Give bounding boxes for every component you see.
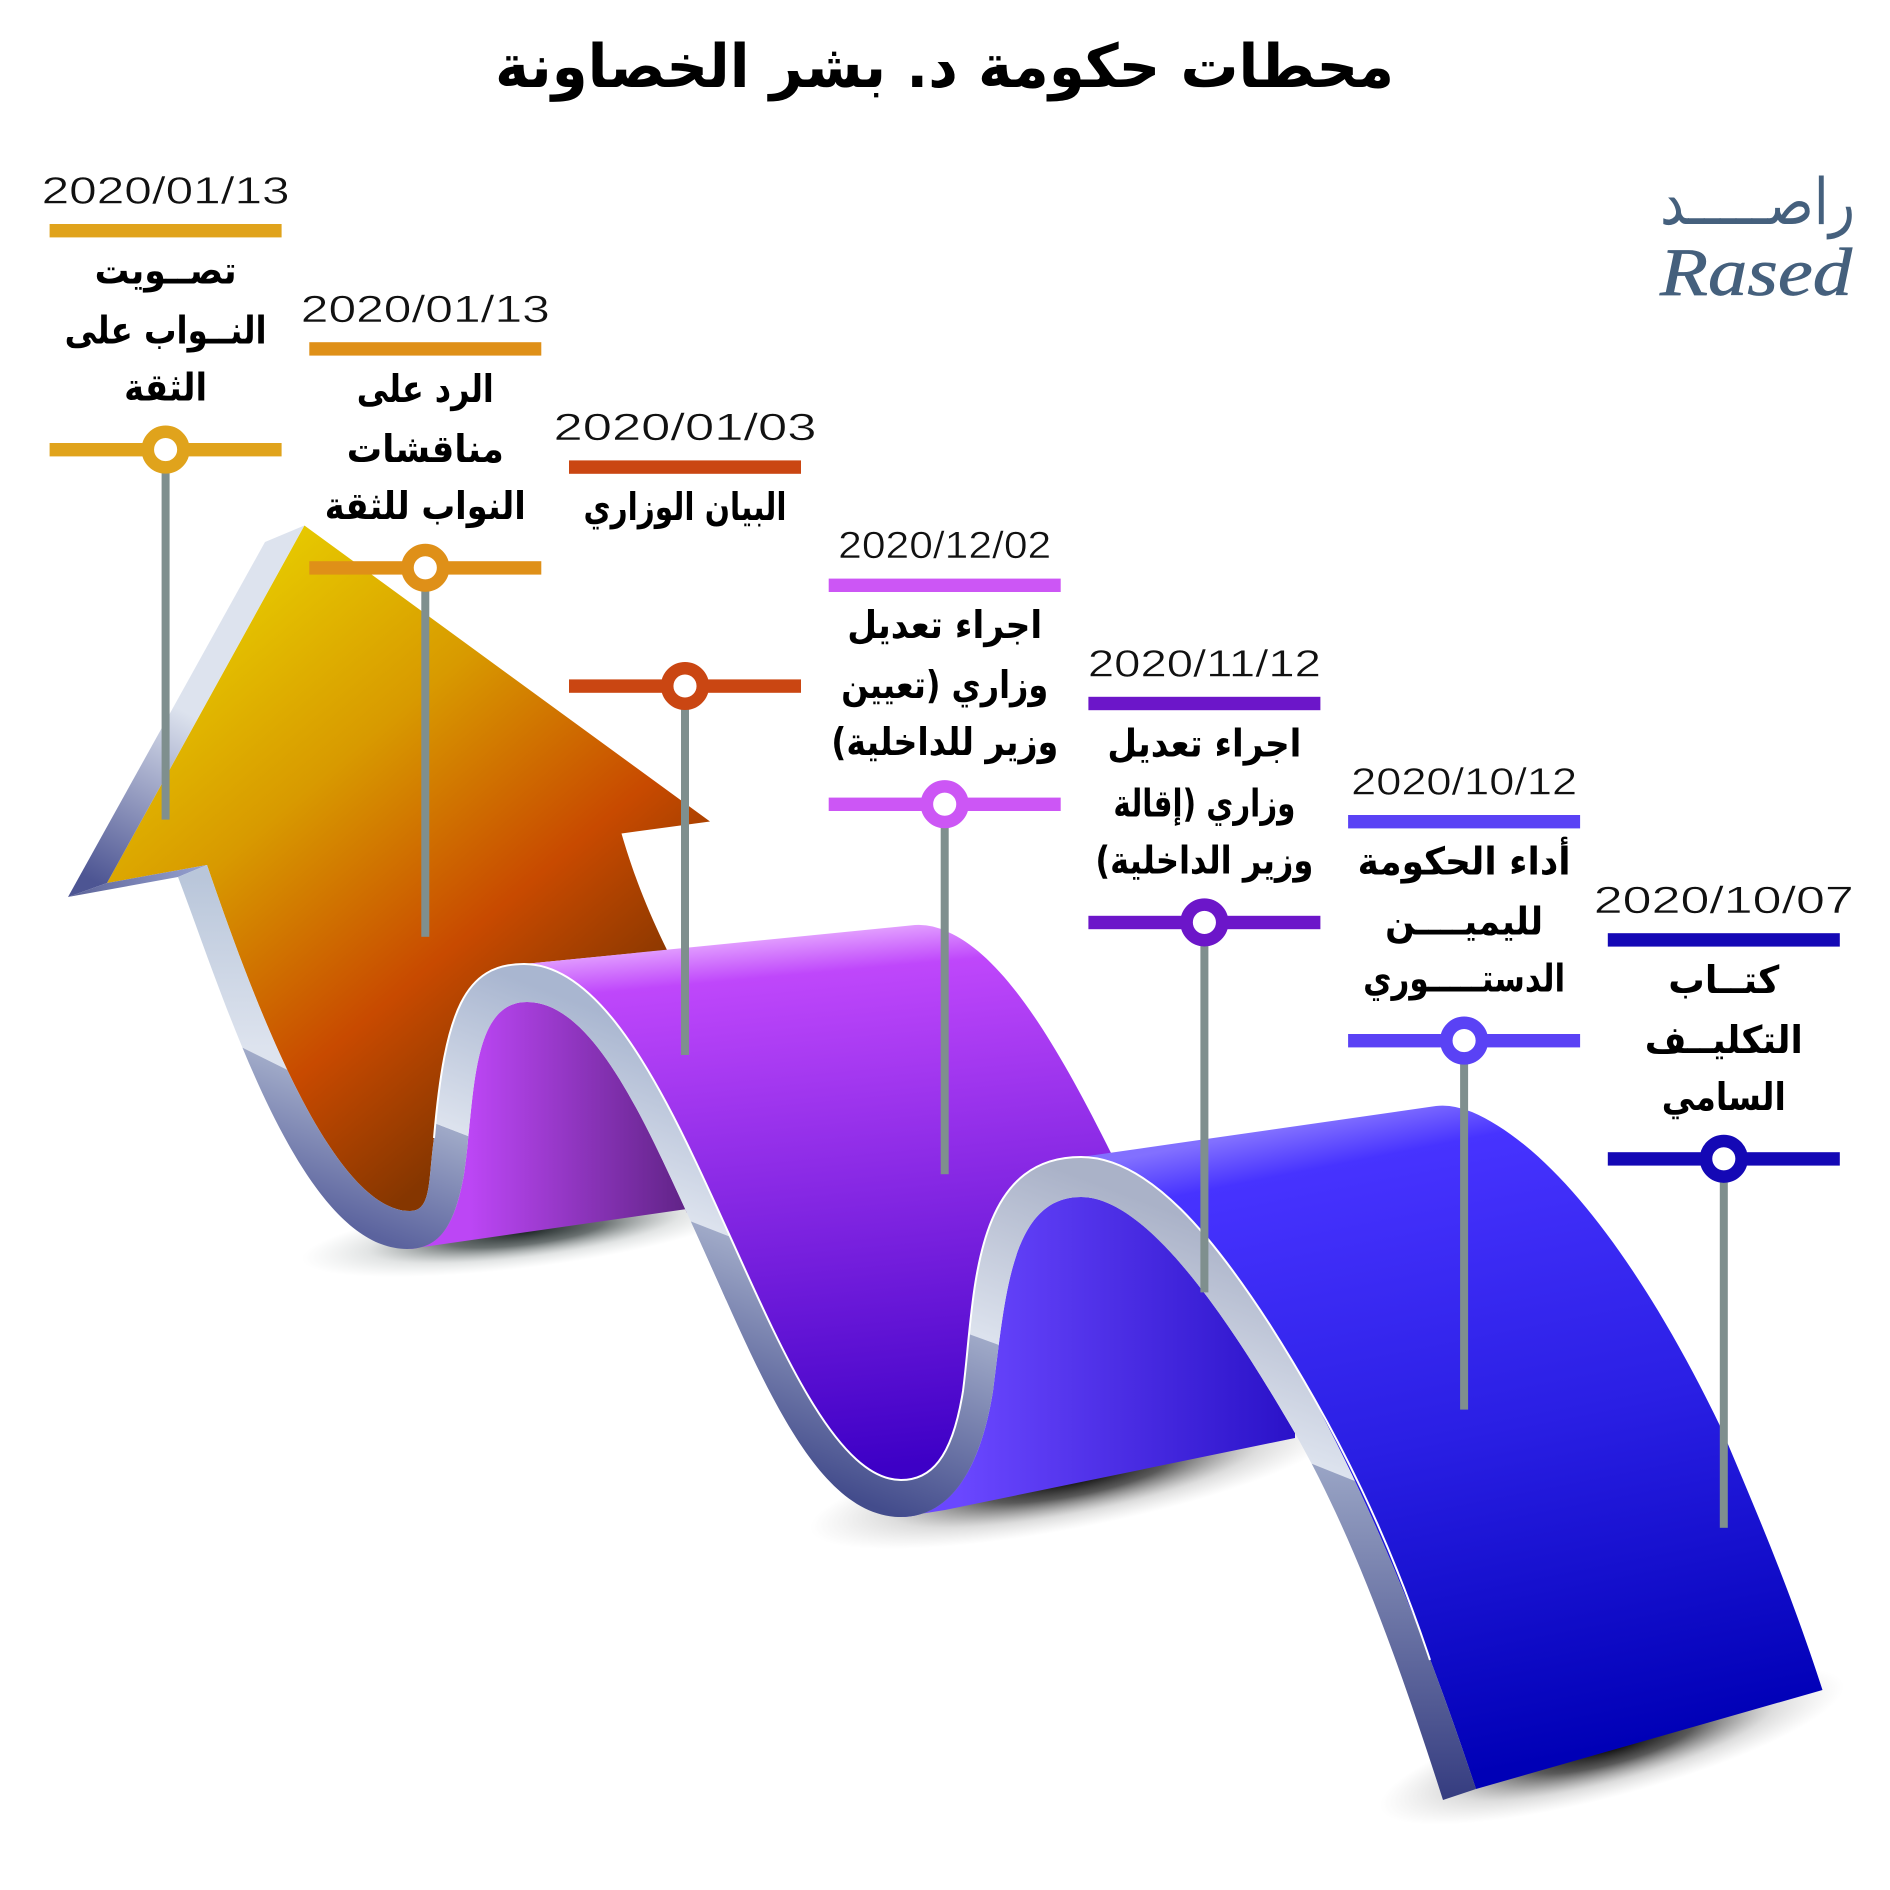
milestone 2 <box>301 289 550 937</box>
marker circle <box>1446 1023 1482 1058</box>
milestone 6 <box>1348 762 1580 1410</box>
stem <box>1200 922 1208 1292</box>
arrow head side bevel <box>68 526 304 897</box>
description: التكليــف <box>1645 1018 1803 1062</box>
marker circle <box>408 550 443 586</box>
description: وزير للداخلية) <box>831 720 1058 765</box>
description: مناقشات <box>347 427 504 471</box>
description <box>831 603 1058 765</box>
marker line <box>569 679 801 693</box>
description: وزير الداخلية) <box>1095 838 1313 883</box>
description: السامي <box>1662 1075 1786 1119</box>
description <box>1095 721 1313 883</box>
stem <box>681 686 689 1055</box>
marker circle <box>1706 1141 1742 1177</box>
stem <box>421 568 429 937</box>
title: محطات حكومة د. بشر الخصاونة <box>495 32 1394 102</box>
date: 2020/11/12 <box>1088 643 1321 685</box>
description: كتــاب <box>1668 958 1780 1002</box>
description: البيان الوزاري <box>584 485 786 529</box>
milestone 4 <box>829 525 1061 1174</box>
top bar <box>569 460 801 474</box>
date: 2020/12/02 <box>838 525 1051 567</box>
arrow head and first ribbon face (orange) <box>107 526 710 1211</box>
marker line <box>309 561 541 575</box>
logo arabic wordmark: راصـــــد <box>1660 166 1855 240</box>
white highlight on ribbon edge <box>434 964 1430 1660</box>
ground shadows <box>297 1169 1857 1856</box>
blue ribbon back <box>901 1197 1295 1517</box>
top bar <box>50 224 282 237</box>
date: 2020/01/13 <box>301 289 550 331</box>
milestone 7 <box>1594 880 1854 1528</box>
description <box>1645 958 1803 1119</box>
marker line <box>1348 1034 1580 1047</box>
description: أداء الحكومة <box>1358 837 1571 884</box>
description: الدستـــــوري <box>1363 957 1565 1001</box>
top bar <box>829 579 1061 592</box>
blue ribbon face <box>1081 1106 1822 1789</box>
date: 2020/01/13 <box>42 171 290 213</box>
description: الرد على <box>357 367 494 411</box>
milestone 5 <box>1088 643 1321 1292</box>
description: الثقة <box>124 366 207 410</box>
marker circle <box>1187 905 1222 940</box>
logo: Rased <box>1659 166 1855 310</box>
description: اجراء تعديل <box>847 603 1042 647</box>
milestone 1 <box>42 171 290 820</box>
top bar <box>309 342 541 356</box>
logo latin wordmark: Rased <box>1659 234 1853 310</box>
description: وزاري (إقالة <box>1113 781 1295 826</box>
description <box>1358 837 1571 1001</box>
description: اجراء تعديل <box>1107 721 1301 765</box>
description: النواب للثقة <box>325 484 526 528</box>
stem <box>162 450 170 820</box>
date: 2020/10/07 <box>1594 880 1854 922</box>
date: 2020/10/12 <box>1351 762 1577 804</box>
marker line <box>50 443 282 456</box>
stem <box>1720 1159 1728 1528</box>
description: تصــويت <box>95 249 237 293</box>
description <box>65 249 267 410</box>
description: وزاري (تعيين <box>841 663 1048 708</box>
description <box>325 367 526 528</box>
metallic ribbon edge <box>150 850 1500 1810</box>
purple ribbon back <box>407 1002 687 1249</box>
top bar <box>1348 815 1580 828</box>
description: النــواب على <box>65 309 267 353</box>
marker circle <box>667 668 703 704</box>
date: 2020/01/03 <box>554 407 816 449</box>
marker line <box>1608 1152 1840 1166</box>
milestone 3 <box>554 407 816 1055</box>
arrow head underside bevel <box>68 865 207 897</box>
top bar <box>1088 697 1320 710</box>
marker circle <box>927 786 962 822</box>
top bar <box>1608 933 1840 947</box>
marker circle <box>148 432 183 467</box>
stem <box>941 804 949 1174</box>
description: لليميــــن <box>1385 900 1543 944</box>
marker line <box>829 798 1061 811</box>
marker line <box>1088 916 1320 929</box>
purple ribbon face <box>524 925 1111 1480</box>
stem <box>1460 1041 1468 1410</box>
